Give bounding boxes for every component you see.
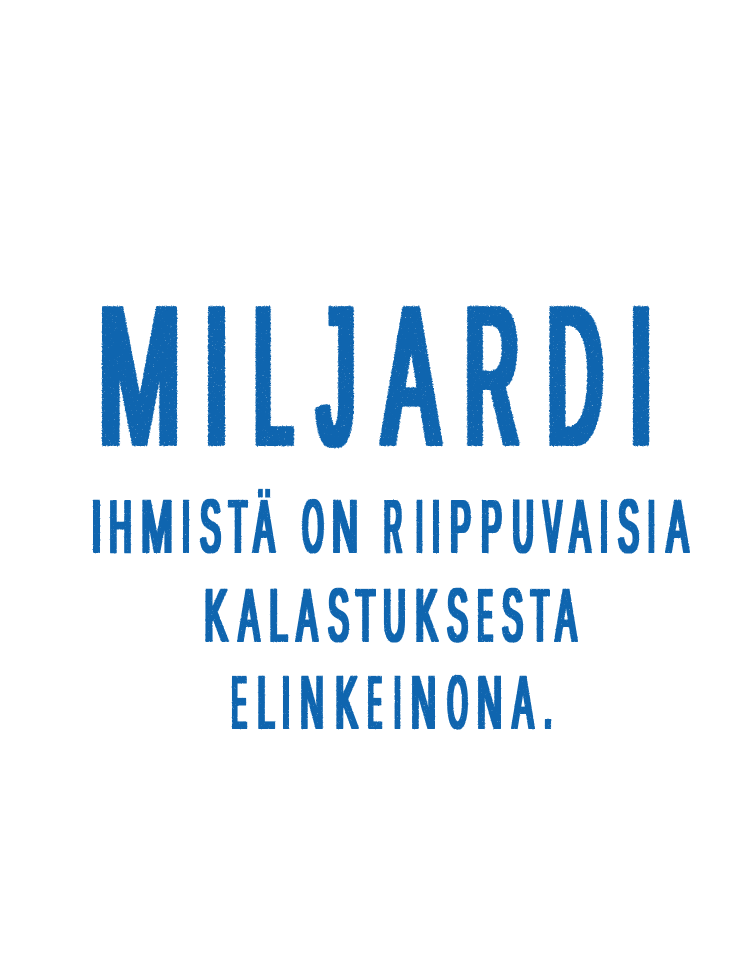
- title: MILJARDI: A: [384, 266, 438, 485]
- title: MILJARDI: R: [466, 267, 518, 486]
- text line: ELINKEINONA.: N: [477, 662, 502, 745]
- text line: ELINKEINONA.: E: [232, 661, 246, 744]
- text line: KALASTUKSESTA: A: [556, 574, 576, 657]
- text line: IHMISTÄ ON RIIPPUVAISIA: A: [570, 485, 590, 568]
- text line: ELINKEINONA.: N: [301, 662, 323, 745]
- text line: IHMISTÄ ON RIIPPUVAISIA: I: [433, 485, 439, 568]
- text line: IHMISTÄ ON RIIPPUVAISIA: V: [544, 485, 561, 568]
- text line: ELINKEINONA.: K: [336, 662, 357, 745]
- title: MILJARDI: L: [254, 267, 292, 486]
- text line: IHMISTÄ ON RIIPPUVAISIA: R: [384, 485, 402, 568]
- text line: KALASTUKSESTA: K: [416, 575, 437, 658]
- text line: IHMISTÄ ON RIIPPUVAISIA: Ä: [254, 485, 274, 568]
- text line: KALASTUKSESTA: U: [384, 574, 405, 657]
- text line: KALASTUKSESTA: A: [297, 574, 317, 657]
- text line: IHMISTÄ ON RIIPPUVAISIA: P: [450, 485, 471, 568]
- text line: KALASTUKSESTA: [205, 574, 576, 658]
- text line: ELINKEINONA.: A: [513, 661, 533, 744]
- text line: IHMISTÄ ON RIIPPUVAISIA: O: [303, 485, 323, 568]
- text line: KALASTUKSESTA: S: [447, 574, 468, 657]
- text line: KALASTUKSESTA: T: [531, 574, 549, 657]
- text line: IHMISTÄ ON RIIPPUVAISIA: T: [229, 485, 247, 568]
- text line: IHMISTÄ ON RIIPPUVAISIA: I: [92, 486, 101, 569]
- text line: IHMISTÄ ON RIIPPUVAISIA: I: [416, 486, 423, 568]
- text line: KALASTUKSESTA: A: [239, 574, 259, 657]
- text line: ELINKEINONA.: I: [283, 661, 289, 744]
- text line: IHMISTÄ ON RIIPPUVAISIA: S: [618, 485, 639, 568]
- title: MILJARDI: D: [548, 268, 602, 486]
- text line: KALASTUKSESTA: S: [328, 574, 349, 657]
- text line: IHMISTÄ ON RIIPPUVAISIA: A: [667, 486, 688, 569]
- text line: ELINKEINONA.: E: [368, 662, 381, 744]
- text line: IHMISTÄ ON RIIPPUVAISIA: I: [183, 485, 189, 568]
- title: MILJARDI: J: [318, 267, 355, 486]
- text line: IHMISTÄ ON RIIPPUVAISIA: I: [601, 485, 607, 568]
- text line: ELINKEINONA.: O: [448, 661, 467, 744]
- text line: KALASTUKSESTA: S: [502, 574, 523, 657]
- text line: ELINKEINONA.: [232, 661, 552, 745]
- text line: ELINKEINONA.: N: [411, 662, 436, 745]
- text line: ELINKEINONA.: I: [394, 662, 401, 744]
- text line: ELINKEINONA.: .: [544, 661, 552, 744]
- text line: IHMISTÄ ON RIIPPUVAISIA: N: [332, 486, 358, 569]
- text line: KALASTUKSESTA: E: [478, 574, 492, 657]
- text line: IHMISTÄ ON RIIPPUVAISIA: H: [110, 485, 131, 568]
- title: MILJARDI: M: [99, 266, 180, 485]
- text line: IHMISTÄ ON RIIPPUVAISIA: S: [200, 485, 221, 568]
- text line: KALASTUKSESTA: T: [356, 574, 375, 657]
- text line: IHMISTÄ ON RIIPPUVAISIA: M: [141, 486, 173, 568]
- text line: IHMISTÄ ON RIIPPUVAISIA: [92, 485, 688, 569]
- text line: KALASTUKSESTA: L: [270, 575, 287, 658]
- text line: IHMISTÄ ON RIIPPUVAISIA: P: [481, 485, 502, 568]
- text line: IHMISTÄ ON RIIPPUVAISIA: U: [513, 485, 533, 568]
- title: MILJARDI: [99, 266, 652, 486]
- text line: IHMISTÄ ON RIIPPUVAISIA: I: [648, 486, 655, 568]
- text line: ELINKEINONA.: L: [258, 661, 274, 744]
- text line: KALASTUKSESTA: K: [205, 575, 227, 658]
- title: MILJARDI: I: [630, 266, 652, 486]
- title: MILJARDI: I: [205, 266, 228, 485]
